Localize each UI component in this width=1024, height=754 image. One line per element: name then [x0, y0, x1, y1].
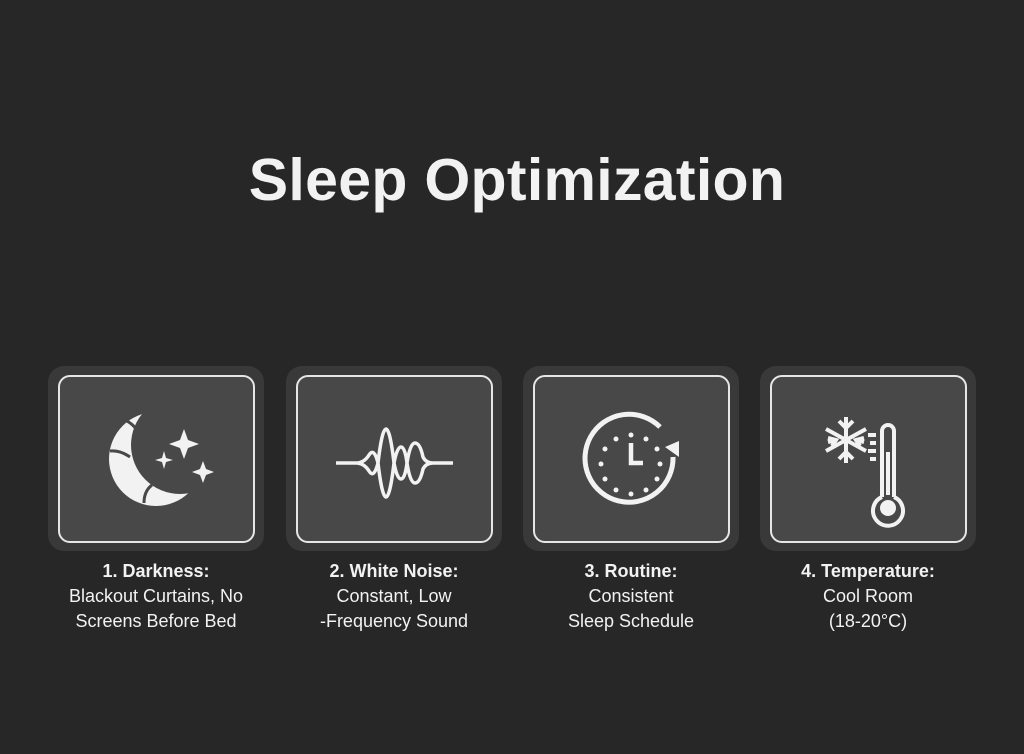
panel: darkness [48, 366, 264, 551]
label: routine: Sleep Schedule [568, 611, 694, 631]
label: temperature: 4. Temperature: [801, 561, 935, 581]
label: routine: 3. Routine: [584, 561, 678, 581]
label: temperature: (18-20°C) [829, 611, 907, 631]
label: darkness: Blackout Curtains, No [69, 586, 243, 606]
icon: moon and stars [109, 414, 214, 506]
panel: temperature [760, 366, 976, 551]
icon: sound wave [336, 427, 453, 499]
label: temperature [801, 561, 935, 631]
label: white noise [320, 561, 468, 631]
label: routine [568, 561, 694, 631]
label: white noise: 2. White Noise: [329, 561, 458, 581]
label: white noise: Constant, Low [336, 586, 452, 606]
title: Sleep Optimization [249, 147, 785, 213]
icon: snowflake and thermometer [825, 417, 906, 528]
label: white noise: -Frequency Sound [320, 611, 468, 631]
label: darkness [69, 561, 243, 631]
panel: routine [523, 366, 739, 551]
panel: white noise [286, 366, 502, 551]
label: darkness: 1. Darkness: [102, 561, 210, 581]
icon: clock with arrow [582, 412, 679, 505]
label: darkness: Screens Before Bed [75, 611, 237, 631]
label: routine: Consistent [588, 586, 674, 606]
label: temperature: Cool Room [823, 586, 913, 606]
